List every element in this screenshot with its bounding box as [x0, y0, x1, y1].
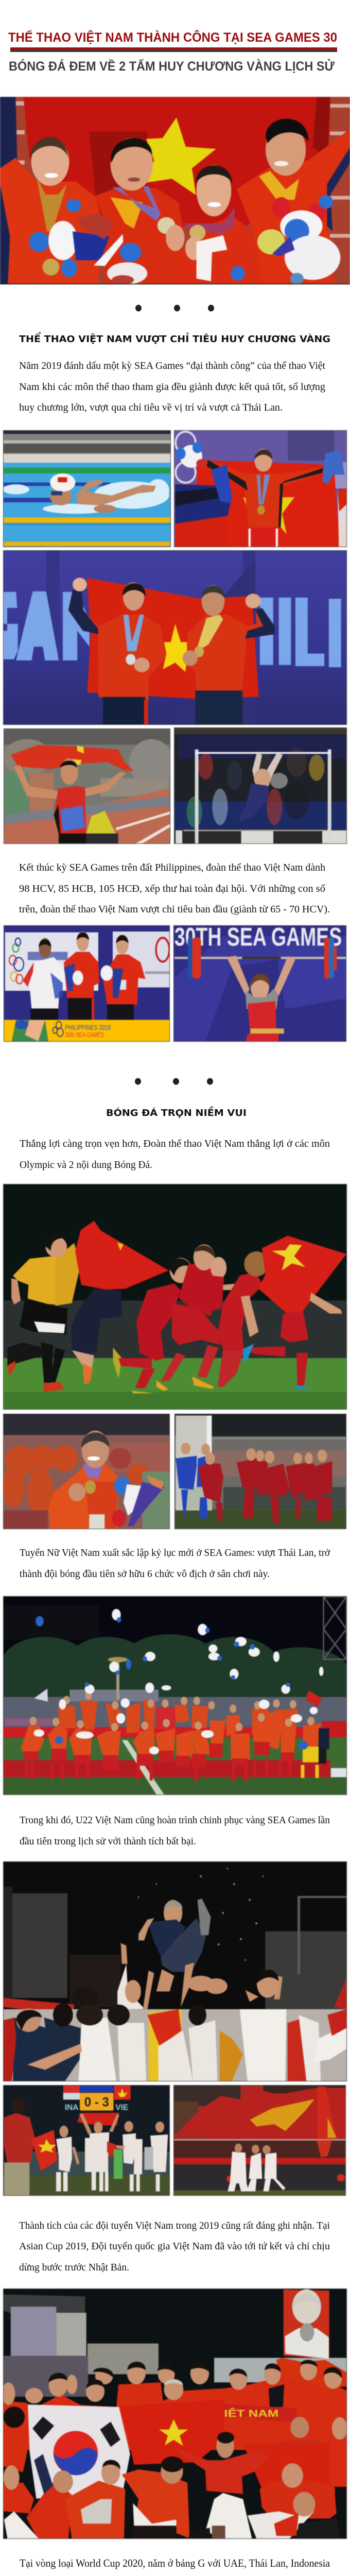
neighbouring flag and arm — [175, 484, 231, 547]
paragraph: national team results: Asian Cup 2019, Đội tuyển quốc gia Việt Nam đã vào tới tứ kết và chỉ chịu — [19, 2241, 330, 2252]
coach — [138, 1899, 211, 1972]
paragraph: women's record: Tuyển Nữ Việt Nam xuất sắc lập kỷ lục mới ở SEA Games: vượt Thái Lan, trở — [20, 1547, 330, 1558]
athlete 3 — [175, 165, 266, 284]
photo: swimmer — [3, 430, 171, 547]
paragraph: intro: huy chương lớn, vượt qua chỉ tiêu về vị trí và vượt cả Thái Lan. — [19, 402, 283, 413]
track — [4, 789, 170, 843]
paragraph: U22 team: Trong khi đó, U22 Việt Nam cũng hoàn trình chinh phục vàng SEA Games lần — [20, 1815, 330, 1826]
photo: runner with flag — [4, 728, 170, 844]
splash — [3, 479, 169, 514]
athlete silver — [23, 938, 67, 1020]
player heads — [181, 1443, 327, 1465]
Vietnamese flag — [121, 2400, 224, 2465]
spectators — [187, 748, 324, 828]
floodlight tower — [324, 1597, 346, 1659]
photo: women's team tossing mascots — [3, 1596, 347, 1795]
athlete 1 — [0, 97, 102, 284]
scoreboard: 0 - 3 — [84, 2095, 109, 2110]
mascot plush toys and bouquets — [29, 195, 340, 285]
Vietnamese flag in crowd — [306, 1690, 322, 1707]
water spray — [138, 1868, 264, 1961]
paragraph: intro: Nam khi các môn thể thao tham gia đều giành được kết quả tốt, số lượng — [19, 381, 325, 393]
giant flag — [177, 2088, 345, 2145]
fence and crowd — [174, 2140, 345, 2160]
second athlete — [86, 811, 118, 843]
photo: team with Korean and Vietnamese flags — [3, 2289, 347, 2539]
photo: players tossing coach Park Hang Seo — [3, 1861, 347, 2081]
flag — [11, 745, 134, 771]
heading: section two: BÓNG ĐÁ TRỌN NIỀM VUI — [106, 1106, 247, 1118]
photo: two tennis medalists with flag — [3, 550, 347, 725]
paragraph: national team results: Thành tích của các đội tuyển Việt Nam trong 2019 cũng rất đáng ghi nhận. Tại — [19, 2220, 330, 2231]
right athlete — [183, 585, 275, 724]
photo: fans' giant flag behind players — [173, 2085, 346, 2196]
athlete 4 — [237, 118, 350, 284]
paragraph: World Cup qualifiers: Tại vòng loại World Cup 2020, năm ở bảng G với UAE, Thái Lan, Indonesia — [20, 2557, 330, 2569]
VIET NAM scarf — [224, 2404, 297, 2422]
stands — [4, 1697, 346, 1728]
games logo rings — [9, 938, 24, 984]
title block — [8, 29, 337, 74]
Thai players — [176, 1456, 208, 1518]
mascots and bouquets — [50, 963, 123, 998]
paragraph: women's record: thành đội bóng đầu tiên sở hữu 6 chức vô địch ở sân chơi này. — [20, 1568, 270, 1580]
scoreboard — [63, 2086, 131, 2112]
yellow games banner: 30th SEA GAMES — [65, 1031, 104, 1039]
flying mascots — [33, 1609, 324, 1754]
paragraph: national team results: dừng bước trước Nhật Bản. — [19, 2262, 129, 2273]
section dots — [135, 1078, 213, 1085]
swimmer — [50, 473, 156, 513]
main title: THỂ THAO VIỆT NAM THÀNH CÔNG TẠI SEA GAMES 30 — [8, 29, 337, 45]
Korean flag — [28, 2404, 130, 2499]
photo: female weightlifter — [173, 925, 346, 1042]
paragraph: football victory: Olympic và 2 nội dung Bóng Đá. — [20, 1159, 152, 1171]
flag — [197, 460, 340, 547]
photo: gymnast on high bar — [174, 727, 347, 844]
athlete 2 — [95, 138, 185, 284]
athlete — [205, 449, 323, 547]
section dots — [135, 305, 214, 311]
back row of team — [2, 2358, 346, 2450]
paragraph: U22 team: đầu tiên trong lịch sử với thành tích bất bại. — [20, 1836, 196, 1847]
photo: women's team running on pitch — [174, 1414, 346, 1529]
portrait of Ho Chi Minh — [284, 2289, 329, 2359]
flag — [87, 578, 259, 699]
high bar — [195, 750, 331, 843]
backdrop lettering — [4, 591, 341, 667]
far right player — [243, 1293, 342, 1389]
paragraph: results — [19, 862, 330, 915]
paragraph: U22 team — [20, 1815, 330, 1847]
photo: athletes on podium — [4, 925, 170, 1042]
scoreboard: INA — [65, 2104, 78, 2112]
heading: section one: THỂ THAO VIỆT NAM VƯỢT CHỈ TIÊU HUY CHƯƠNG VÀNG — [19, 332, 330, 345]
front row of team — [4, 2406, 340, 2538]
photo: U22 team with scoreboard 0-3 — [3, 2085, 170, 2196]
goalkeeper — [7, 1233, 81, 1392]
athlete gold — [64, 931, 99, 1020]
paragraph: intro: Năm 2019 đánh dấu một kỳ SEA Games “đại thành công” của thể thao Việt — [19, 360, 325, 371]
blurred team in background — [3, 1446, 148, 1516]
players below — [4, 1964, 346, 2081]
Vietnam players — [198, 1459, 332, 1523]
flags — [31, 2130, 57, 2171]
lifter — [226, 956, 296, 1041]
red flag left — [75, 1221, 168, 1290]
photo: women's team celebrating with flags — [3, 1184, 347, 1410]
paragraph: results: trên, đoàn thể thao Việt Nam vượt chỉ tiêu ban đầu (giành từ 65 - 70 HCV). — [19, 904, 330, 915]
person in red shirt — [4, 2098, 35, 2195]
paragraph: national team results — [19, 2220, 330, 2273]
plush toy and bouquets — [176, 442, 344, 503]
goal net — [176, 1416, 212, 1511]
trees — [1, 1634, 349, 1700]
flag star — [145, 117, 216, 195]
podium — [4, 1760, 330, 1777]
flag — [24, 97, 330, 226]
barbell — [174, 938, 346, 978]
paragraph: women's record — [20, 1547, 330, 1580]
team standing back row — [58, 1700, 299, 1735]
scoreboard: VIE — [115, 2104, 128, 2112]
team heads — [30, 1691, 314, 1731]
photo: women's head coach with medal — [3, 1414, 170, 1529]
gymnast — [240, 753, 283, 821]
yellow games banner — [4, 1020, 169, 1041]
players in white — [227, 2151, 286, 2191]
paragraph: football victory: Thắng lợi càng trọn vẹn hơn, Đoàn thể thao Việt Nam thắng lợi ở các môn — [20, 1138, 330, 1149]
paragraph: football victory — [20, 1138, 330, 1171]
red players — [113, 1244, 269, 1394]
VIET NAM scarf: IỆT NAM — [224, 2408, 278, 2419]
coach — [48, 1431, 118, 1529]
runner — [14, 759, 126, 843]
subtitle: BÓNG ĐÁ ĐEM VỀ 2 TẤM HUY CHƯƠNG VÀNG LỊCH SỬ — [9, 58, 335, 74]
hero photo: four athletes with Vietnamese flag — [0, 96, 350, 285]
red flag right — [258, 1235, 346, 1321]
raised hands — [121, 1943, 283, 2009]
right side flag and staff — [227, 2417, 347, 2497]
yellow games banner: PHILIPPINES 2019 — [65, 1024, 111, 1031]
athlete bronze — [103, 935, 145, 1020]
paragraph: results: Kết thúc kỳ SEA Games trên đất Philippines, đoàn thể thao Việt Nam dành — [19, 862, 325, 873]
paragraph: intro — [19, 360, 325, 413]
staff member — [72, 1289, 122, 1384]
photo: weightlifter holding flag — [174, 430, 347, 547]
advertising board — [174, 2158, 345, 2164]
paragraph: results: 98 HCV, 85 HCB, 105 HCĐ, xếp thư hai toàn đại hội. Với những con số — [19, 883, 325, 894]
mascot and bouquet — [112, 1476, 165, 1527]
U22 players — [56, 2114, 168, 2191]
left athlete — [68, 578, 166, 724]
team front row — [21, 1713, 329, 1782]
